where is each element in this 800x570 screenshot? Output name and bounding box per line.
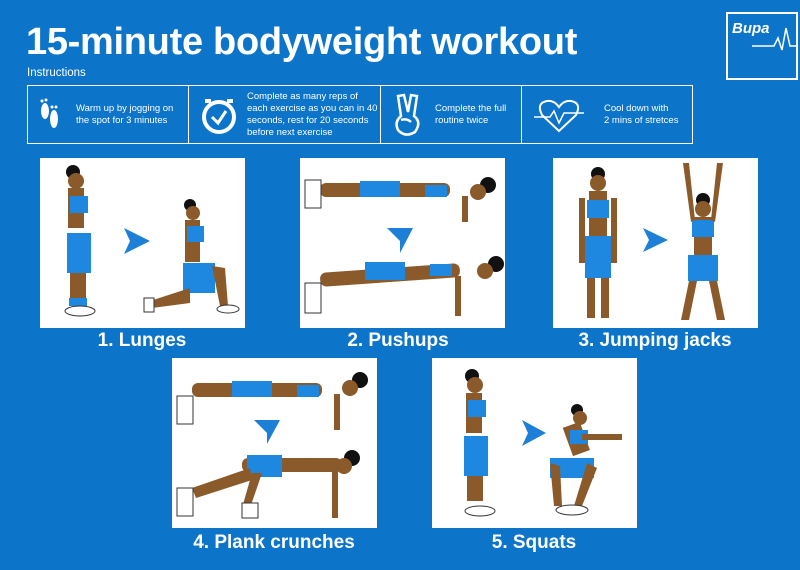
step: twice: Complete the full <box>435 103 506 114</box>
arrow <box>254 420 280 444</box>
step: timing: seconds, rest for 20 seconds <box>247 115 368 126</box>
title: 15-minute bodyweight workout <box>26 21 577 63</box>
step: twice <box>381 86 522 144</box>
step: timing: Complete as many reps of <box>247 91 358 102</box>
step: cool down: Cool down with <box>604 103 668 114</box>
arrow <box>522 420 546 446</box>
step: warm up <box>28 86 189 144</box>
panel: pushups <box>300 158 505 328</box>
label: squats: 5. Squats <box>492 532 576 553</box>
panel: jumping jacks <box>553 158 758 328</box>
label: pushups: 2. Pushups <box>347 330 449 351</box>
figure lunging <box>144 199 239 313</box>
step: cool down <box>534 100 678 132</box>
step: warm up: Warm up by jogging on <box>76 103 173 114</box>
label: lunges: 1. Lunges <box>98 330 186 351</box>
arrow <box>643 228 668 252</box>
panel: squats <box>432 358 637 528</box>
step: warm up: the spot for 3 minutes <box>76 115 167 126</box>
logo: Bupa <box>732 20 770 37</box>
label: jumping jacks: 3. Jumping jacks <box>578 330 732 351</box>
arrow <box>387 228 413 253</box>
panel: lunges <box>40 158 245 328</box>
step: timing: before next exercise <box>247 127 333 138</box>
arrow <box>124 228 150 254</box>
instructions heading: Instructions <box>27 67 86 79</box>
instructions box <box>27 85 693 144</box>
step: cool down: 2 mins of stretces <box>604 115 678 126</box>
label: plank crunches: 4. Plank crunches <box>193 532 355 553</box>
step: timing <box>189 86 381 144</box>
step: twice: routine twice <box>435 115 488 126</box>
logo <box>726 12 798 80</box>
panel: plank crunches <box>172 358 377 528</box>
figure standing <box>65 165 95 316</box>
step: timing: each exercise as you can in 40 <box>247 103 377 114</box>
